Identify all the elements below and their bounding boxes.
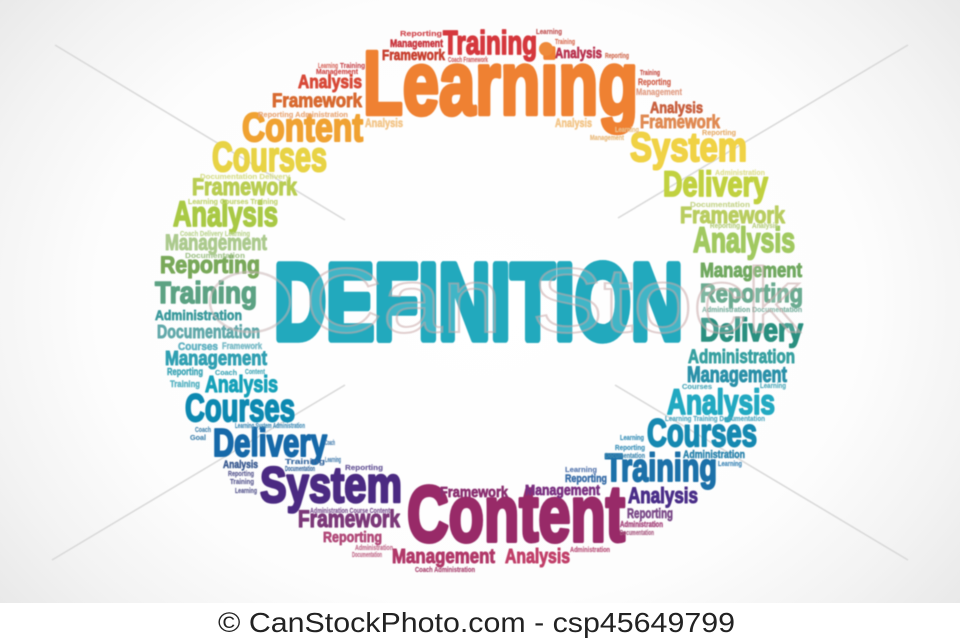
tiny filler words: Reporting [228, 471, 254, 478]
word: System yellow: System [630, 124, 747, 170]
word: Analysis pale right: Analysis [555, 116, 592, 130]
tiny filler words: Learning [620, 435, 644, 442]
watermark logo ring [210, 272, 290, 332]
tiny filler words: Reporting [605, 53, 629, 60]
word: Content large: Content [407, 469, 625, 558]
tiny filler words: Courses [682, 384, 712, 391]
tiny filler words: Coach Delivery Learning [180, 231, 250, 238]
tiny filler words: Reporting [710, 223, 740, 230]
tiny filler words: Reporting [638, 77, 671, 87]
word: Framework top: Framework [382, 47, 446, 64]
tiny filler words: Coach [215, 370, 237, 377]
word: Analysis lime left: Analysis [173, 195, 278, 234]
icon: orange dot [539, 42, 553, 56]
word: Administration left: Administration [155, 307, 242, 323]
word: Reporting lower right: Reporting [627, 505, 673, 521]
tiny filler words: Learning [235, 488, 257, 495]
word: Analysis small lower left: Analysis [223, 459, 258, 471]
tiny filler words: Learning [615, 127, 639, 134]
word: Framework above Content: Framework [440, 484, 509, 501]
tiny filler words: Training [555, 39, 575, 46]
word: Reporting lower left: Reporting [323, 529, 382, 546]
word: Analysis lower right: Analysis [628, 483, 698, 508]
tiny filler words: Reporting [615, 445, 645, 452]
tiny filler words: Learning System Administration [235, 423, 305, 430]
tiny filler words: Training [230, 479, 254, 486]
tiny filler words: Learning Courses Training [188, 199, 278, 206]
tiny filler words: Training [340, 63, 365, 70]
word: Framework lime left: Framework [192, 174, 298, 201]
tiny filler words: Coach Framework [448, 57, 488, 64]
tiny filler words: Learning [318, 63, 338, 70]
word: Courses right: Courses [647, 412, 757, 455]
tiny filler words: Administration [355, 545, 393, 552]
tiny filler words: Coach Administration [415, 567, 475, 574]
word: Reporting small left: Reporting [167, 367, 203, 378]
tiny filler words: Training [640, 70, 660, 77]
word: Administration right: Administration [688, 347, 795, 368]
tiny filler words: Documentation [620, 530, 654, 537]
word: Content upper left: Content [242, 106, 363, 150]
word: Delivery lime right: Delivery [663, 165, 768, 204]
word cloud ring [155, 24, 803, 574]
word: Courses blue left: Courses [185, 387, 295, 430]
word: Management above Content: Management [525, 482, 600, 499]
tiny filler words: Administration [570, 547, 610, 554]
tiny filler words: Documentation [285, 466, 315, 473]
word: Management top: Management [390, 38, 443, 50]
tiny filler words: Analysis [752, 223, 778, 230]
tiny filler words: Reporting Administration [258, 112, 348, 119]
word: Reporting small lower right: Reporting [565, 473, 607, 485]
word: Training small left: Training [170, 379, 200, 389]
word: Courses small left: Courses [178, 341, 218, 353]
tiny filler words: Documentation Delivery [200, 174, 290, 181]
tiny filler words: Coach [195, 427, 211, 434]
word: Analysis green right: Analysis [693, 221, 795, 260]
word: Management bottom: Management [392, 546, 495, 568]
watermark [210, 250, 801, 352]
word: Delivery blue: Delivery [213, 422, 327, 465]
word: Delivery right: Delivery [700, 312, 803, 348]
word: Reporting left: Reporting [160, 252, 260, 279]
word: Framework lower left: Framework [298, 506, 401, 533]
word: Framework lime right: Framework [680, 202, 785, 228]
tiny filler words: Learning [718, 461, 742, 468]
tiny filler words: Documentation [605, 453, 645, 460]
tiny filler words: Management [636, 87, 682, 97]
word: Analysis upper left: Analysis [298, 72, 362, 92]
word: Framework small left: Framework [222, 341, 263, 351]
word: Analysis bottom: Analysis [505, 546, 570, 568]
word: Documentation left: Documentation [157, 322, 260, 342]
word: Analysis pale left: Analysis [365, 116, 403, 130]
tiny filler words [180, 29, 802, 574]
tiny filler words: Content [245, 369, 265, 376]
tiny filler words: Administration Course Content [310, 508, 391, 515]
tiny filler words: Reporting [400, 31, 442, 38]
word: Analysis top: Analysis [555, 45, 602, 62]
word: Framework upper left: Framework [272, 91, 362, 112]
word: Analysis upper right: Analysis [650, 100, 703, 117]
word: Analysis right: Analysis [667, 383, 775, 422]
word: Training lower right: Training [605, 447, 717, 490]
tiny filler words: Learning [760, 383, 786, 390]
tiny filler words: Learning [536, 29, 562, 36]
word: Management green right: Management [700, 260, 802, 282]
word: Learning: Learning [363, 34, 638, 134]
footer strip [0, 603, 960, 640]
tiny filler words: Management [316, 69, 359, 76]
word: Training left: Training [155, 275, 257, 310]
tiny filler words: Coach [325, 440, 335, 447]
tiny filler words: Reporting [345, 465, 383, 472]
tiny filler words: Reporting [702, 130, 736, 137]
word: Management right: Management [687, 362, 787, 387]
tiny filler words: Goal [190, 435, 206, 442]
word: Training top: Training [443, 24, 537, 61]
footer credit: © CanStockPhoto.com - csp45649799 [218, 607, 735, 638]
tiny filler words: Learning [565, 467, 597, 474]
tiny filler words: Management [590, 135, 625, 142]
tiny filler words: Learning Training Documentation [665, 416, 765, 423]
word: Administration small right: Administration [683, 449, 745, 461]
word: Management teal left: Management [165, 348, 267, 370]
word: Courses yellow: Courses [212, 133, 327, 180]
main heading DEFINITION: DEFINITION [274, 241, 683, 362]
tiny filler words: Learning [325, 457, 341, 464]
watermark text: Can Stock [305, 250, 801, 352]
word: Administration small lower right: Administration [620, 520, 663, 529]
tiny filler words: Administration [715, 170, 765, 177]
tiny filler words: Documentation [185, 253, 245, 260]
watermark crossing lines [52, 45, 908, 560]
word: System purple: System [260, 457, 402, 513]
word: Reporting right: Reporting [700, 278, 803, 308]
tiny filler words: Training [285, 459, 325, 466]
tiny filler words: Administration Documentation [702, 307, 802, 314]
word: Management pale left: Management [165, 230, 268, 255]
tiny filler words: Documentation [352, 552, 382, 559]
word: Framework upper right: Framework [640, 112, 721, 132]
tiny filler words: Documentation [690, 202, 750, 209]
word: Analysis blue left: Analysis [205, 371, 278, 397]
